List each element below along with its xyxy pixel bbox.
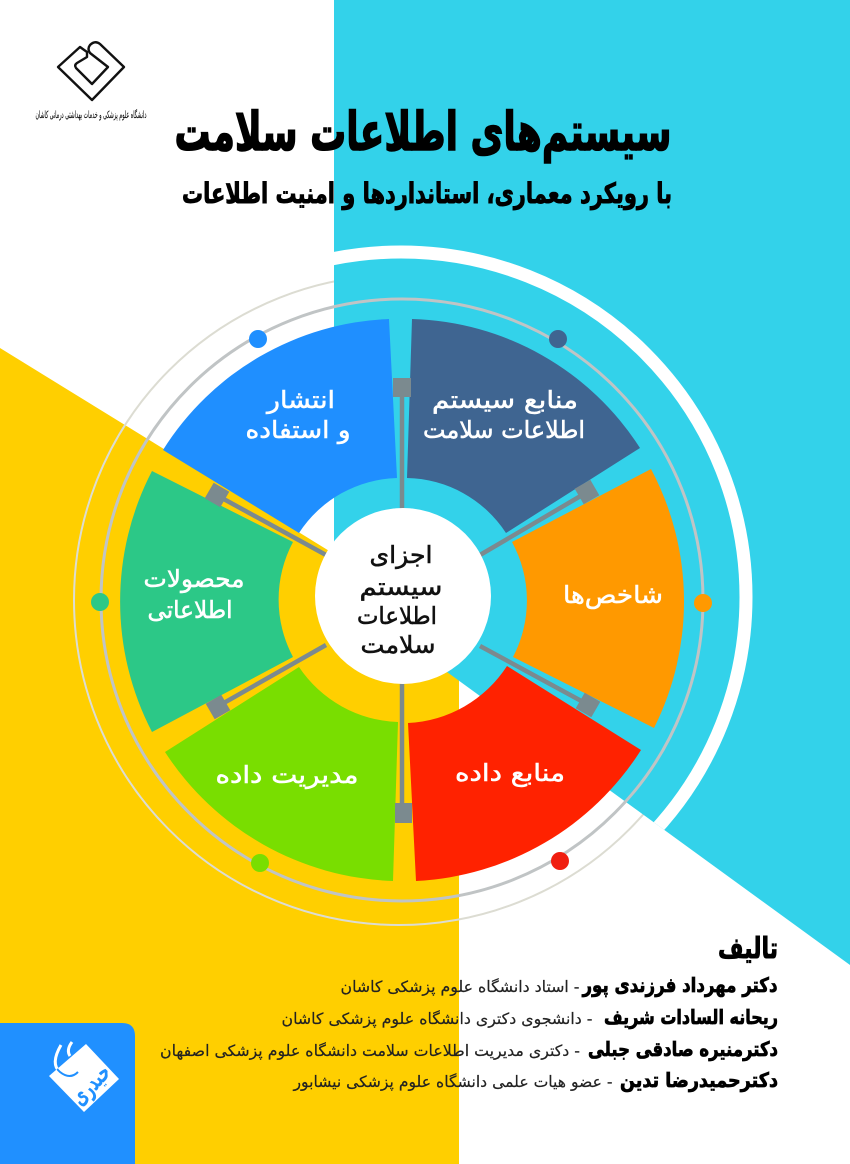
author 3: - دکتری مدیریت اطلاعات سلامت دانشگاه علوم پزشکی اصفهان xyxy=(160,1042,580,1061)
author 1 xyxy=(340,973,778,998)
center circle: سیستم xyxy=(360,573,442,601)
sector: data sources: منابع داده xyxy=(455,759,565,787)
center circle: سلامت xyxy=(360,631,436,659)
background: cyan shape xyxy=(334,0,850,965)
sector: dissemination and use: انتشار xyxy=(266,386,335,414)
subtitle: با رویکرد معماری، استانداردها و امنیت اطلاعات xyxy=(182,177,672,210)
sector: system resources: منابع سیستم xyxy=(432,386,578,414)
author 1: دکتر مهرداد فرزندی پور xyxy=(582,973,778,998)
sector: data sources xyxy=(408,666,641,881)
university logo xyxy=(36,42,146,121)
author 4: - عضو هیات علمی دانشگاه علوم پزشکی نیشابور xyxy=(292,1073,612,1092)
author 1: - استاد دانشگاه علوم پزشکی کاشان xyxy=(340,978,580,997)
sector: indicators: شاخص‌ها xyxy=(563,581,663,609)
sector: indicators xyxy=(512,469,684,728)
sector: information products xyxy=(120,471,293,732)
authors heading: تالیف xyxy=(718,931,778,965)
center circle: اجزای xyxy=(370,541,432,569)
outer thin ring xyxy=(74,275,724,925)
ring dots xyxy=(91,330,712,872)
author 3 xyxy=(160,1037,778,1061)
author 2 xyxy=(282,1005,778,1029)
text: دانشگاه علوم پزشکی و خدمات بهداشتی درمانی کاشان xyxy=(36,109,146,121)
sector: system resources xyxy=(407,319,640,533)
background: yellow shape xyxy=(0,348,459,1164)
author 2: ریحانه السادات شریف xyxy=(604,1005,778,1029)
center circle xyxy=(315,508,491,684)
sector: dissemination and use xyxy=(163,319,397,533)
publisher logo xyxy=(0,1023,135,1164)
center circle: اطلاعات xyxy=(357,602,437,630)
gray ring xyxy=(101,299,703,901)
connectors xyxy=(205,378,600,823)
sector: data management xyxy=(165,667,398,881)
author 4: دکترحمیدرضا تدین xyxy=(620,1068,778,1092)
white ring on cyan xyxy=(334,246,752,830)
sector: dissemination and use: و استفاده xyxy=(246,416,350,444)
sector: system resources: اطلاعات سلامت xyxy=(423,416,585,444)
sector: information products: محصولات xyxy=(144,565,244,593)
author 3: دکترمنیره صادقی جبلی xyxy=(588,1037,778,1061)
author 2: - دانشجوی دکتری دانشگاه علوم پزشکی کاشان xyxy=(282,1010,592,1029)
publisher logo: حیدری xyxy=(65,1058,116,1111)
sector: data management: مدیریت داده xyxy=(216,761,358,789)
sector: information products: اطلاعاتی xyxy=(148,596,232,624)
author 4 xyxy=(292,1068,778,1092)
